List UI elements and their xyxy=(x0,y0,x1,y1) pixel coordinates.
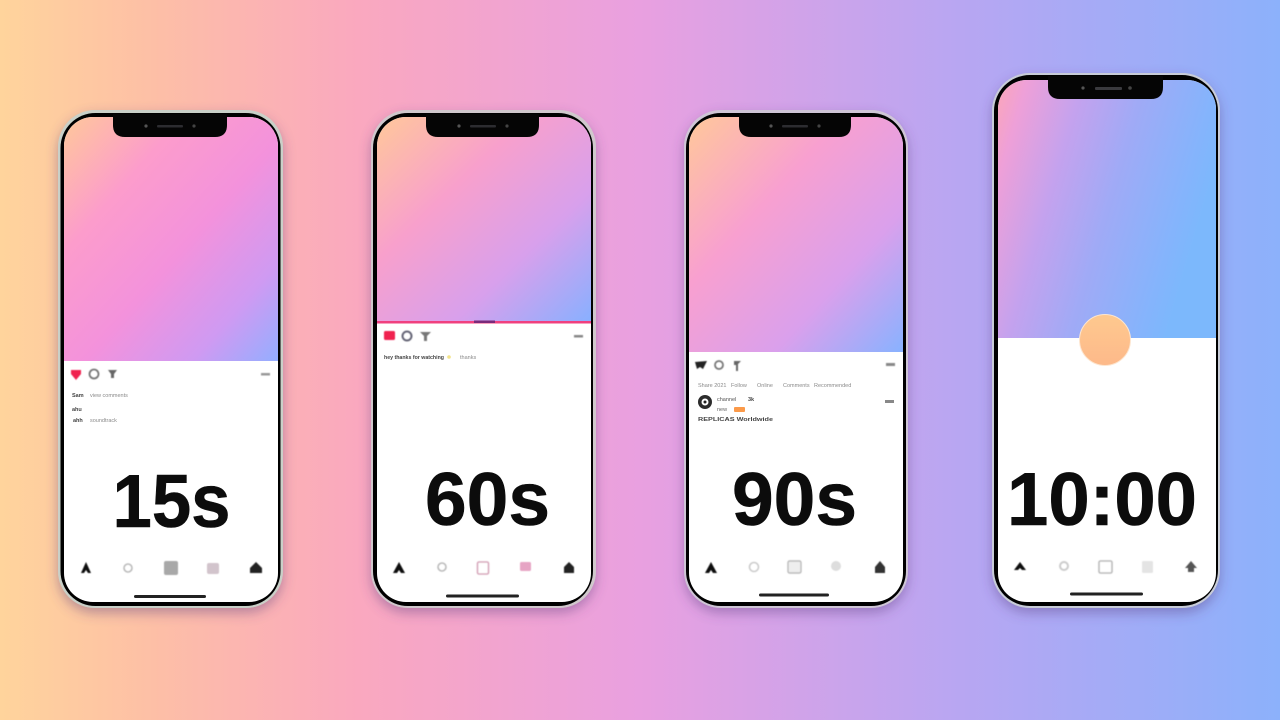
caption lines: Sam xyxy=(72,393,84,399)
home indicator xyxy=(759,594,829,596)
caption lines: ahu xyxy=(72,407,82,413)
bottom navigation xyxy=(393,562,574,574)
phone: 15s xyxy=(58,110,283,608)
action icons xyxy=(71,370,270,380)
home indicator xyxy=(446,594,519,598)
duration label: 90s xyxy=(732,457,857,541)
screen xyxy=(689,117,903,602)
account row xyxy=(717,397,894,413)
avatar xyxy=(698,395,712,409)
action icons xyxy=(384,331,583,341)
tab labels xyxy=(698,383,851,389)
phone frame xyxy=(58,110,283,608)
post title: REPLICAS Worldwide xyxy=(698,417,773,423)
notch xyxy=(113,114,227,137)
screen xyxy=(998,80,1216,602)
duration label: 15s xyxy=(112,459,230,543)
play circle xyxy=(1080,314,1130,366)
phone: 10:00 xyxy=(992,73,1220,608)
tab labels: Recommended xyxy=(814,383,851,389)
home indicator xyxy=(134,595,206,598)
screen xyxy=(64,117,278,602)
caption line: hey thanks for watching xyxy=(384,355,444,361)
tab labels: Comments xyxy=(783,383,810,389)
account row: 3k xyxy=(748,397,755,403)
account row: new xyxy=(717,407,727,413)
duration label: 60s xyxy=(425,457,550,541)
phone frame xyxy=(684,110,908,608)
duration label: 10:00 xyxy=(1007,457,1197,541)
caption lines: view comments xyxy=(90,393,128,399)
notch xyxy=(426,114,539,137)
phone: 90s xyxy=(684,110,908,608)
caption lines xyxy=(72,393,128,424)
caption lines: soundtrack xyxy=(90,418,117,424)
screen xyxy=(377,117,591,602)
tab labels: Follow xyxy=(731,383,747,389)
caption lines: ahh xyxy=(73,418,83,424)
phone: 60s xyxy=(371,110,596,608)
phone frame xyxy=(371,110,596,608)
phone frame xyxy=(992,73,1220,608)
emoji and caption end xyxy=(447,355,476,361)
bottom navigation xyxy=(81,561,262,575)
notch xyxy=(1048,76,1163,99)
bottom navigation xyxy=(705,561,885,573)
tab labels: Share 2021 xyxy=(698,383,726,389)
home indicator xyxy=(1070,592,1143,596)
notch xyxy=(739,114,851,137)
tab labels: Online xyxy=(757,383,773,389)
emoji and caption end: thanks xyxy=(460,355,476,361)
action icons xyxy=(695,361,895,371)
bottom navigation xyxy=(1014,561,1197,573)
account row: channel xyxy=(717,397,736,403)
